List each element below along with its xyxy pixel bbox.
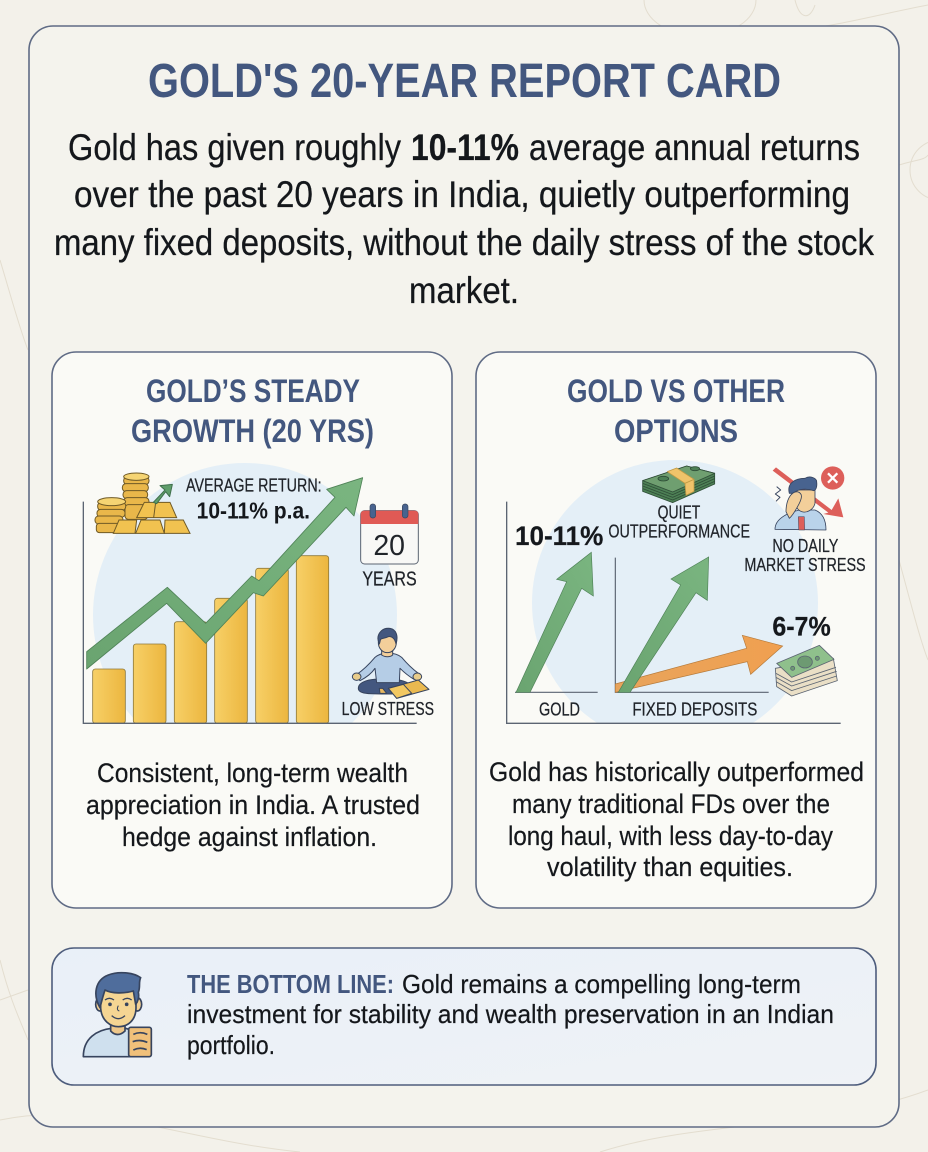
panel body text <box>489 757 864 882</box>
labels <box>515 501 866 719</box>
intro text: market. <box>409 270 519 311</box>
intro text: Gold has given roughly <box>68 127 401 168</box>
title: GOLD'S 20-YEAR REPORT CARD <box>148 55 781 108</box>
intro text: 10-11% <box>411 127 519 168</box>
panel heading: GROWTH (20 YRS) <box>131 413 374 449</box>
labels: NO DAILY <box>772 535 838 556</box>
arrow: fixed deposits <box>615 635 783 692</box>
panel: the bottom line <box>52 948 876 1085</box>
bar chart with growth arrow: YEARS <box>362 569 417 591</box>
labels: 6-7% <box>772 612 831 642</box>
panel heading: GOLD’S STEADY <box>146 373 360 409</box>
panel heading: OPTIONS <box>614 413 738 449</box>
arrow: gold <box>516 552 593 692</box>
arrow: outperformance <box>618 557 709 692</box>
bottom line text: THE BOTTOM LINE: <box>187 969 394 999</box>
icon: calendar 20 years: 20 <box>373 530 405 562</box>
panel heading: GOLD VS OTHER <box>567 373 785 409</box>
icon: stressed man with falling chart <box>773 466 844 530</box>
intro text: over the past 20 years in India, quietly outperforming <box>74 174 850 215</box>
labels: 10-11% <box>515 521 603 551</box>
intro text: average annual returns <box>529 127 860 168</box>
bottom line text <box>187 969 834 1060</box>
bar chart with growth arrow <box>83 473 434 723</box>
panel body text: many traditional FDs over the <box>512 789 830 819</box>
intro text <box>54 127 874 311</box>
bottom line text: portfolio. <box>187 1030 275 1060</box>
growth arrow <box>87 478 363 669</box>
panel body text: volatility than equities. <box>547 852 793 882</box>
panel body text: Gold has historically outperformed <box>489 757 864 787</box>
average return label: AVERAGE RETURN: <box>186 475 322 496</box>
panel: gold's steady growth <box>52 352 452 908</box>
icon: gold coins and bars <box>95 473 190 533</box>
panel heading <box>567 373 785 449</box>
panel body text: appreciation in India. A trusted <box>86 790 420 820</box>
bottom line text: investment for stability and wealth preservation in an Indian <box>187 999 834 1029</box>
labels: MARKET STRESS <box>744 554 866 575</box>
background circle <box>532 460 818 746</box>
panel body text: hedge against inflation. <box>122 822 377 852</box>
icon: banded money stack <box>643 466 715 503</box>
panel heading <box>131 373 374 449</box>
bar chart with growth arrow: LOW STRESS <box>342 698 434 719</box>
panel: gold vs other options <box>476 352 876 908</box>
panel body text: long haul, with less day-to-day <box>508 821 833 851</box>
background circle <box>93 463 397 722</box>
panel body text: Consistent, long-term wealth <box>97 758 408 788</box>
labels: FIXED DEPOSITS <box>632 698 757 719</box>
comparison chart <box>507 466 866 723</box>
icon: cash stack <box>775 645 837 696</box>
labels: GOLD <box>539 698 580 719</box>
bar chart with growth arrow: 10-11% p.a. <box>197 497 310 523</box>
bottom line text: Gold remains a compelling long-term <box>402 969 801 999</box>
labels: OUTPERFORMANCE <box>608 520 750 541</box>
icon: calendar 20 years <box>361 504 418 564</box>
icon: person with notes <box>83 973 151 1057</box>
icon: meditating person with gold bar <box>352 628 429 698</box>
panel body text <box>86 758 420 852</box>
labels: QUIET <box>658 501 700 522</box>
